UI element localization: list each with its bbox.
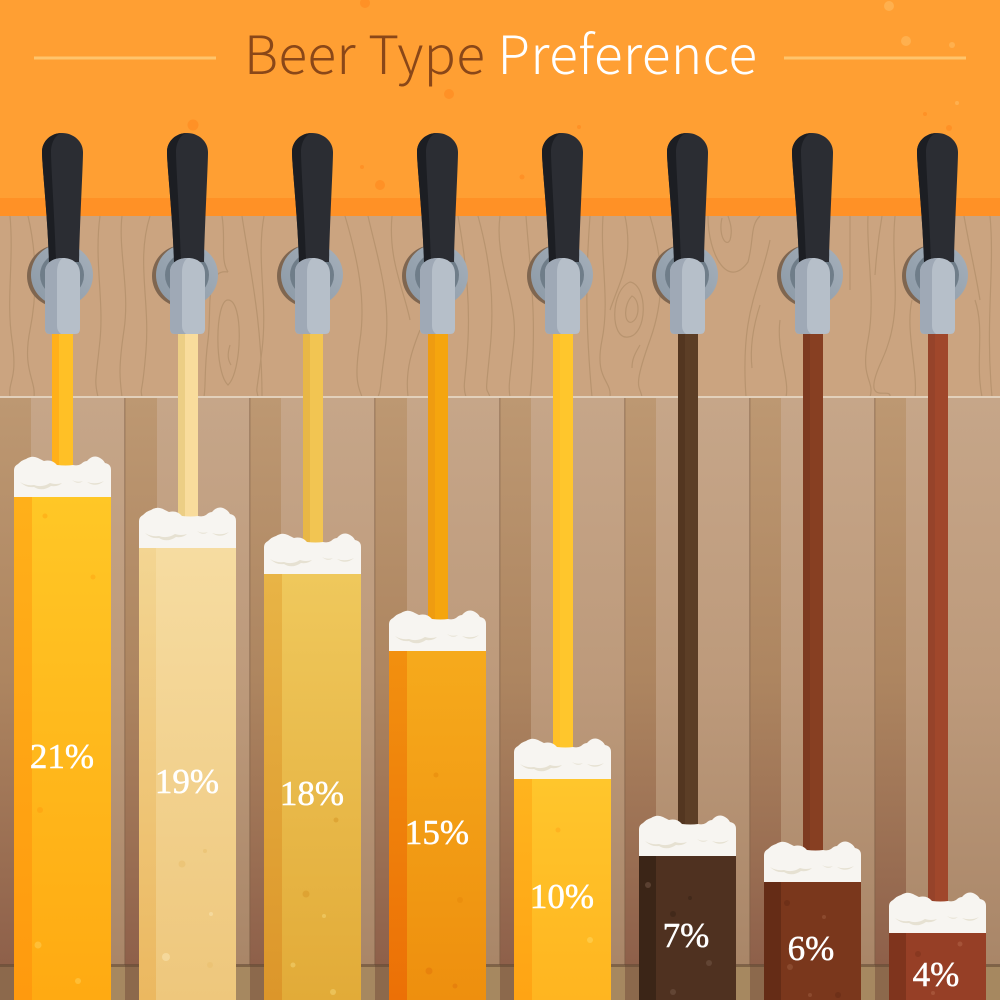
label 18%: 18% — [280, 774, 344, 813]
label 19%: 19% — [155, 762, 219, 801]
label 21%: 21% — [30, 737, 94, 776]
lower wood planks — [0, 396, 1000, 1000]
title rule left — [34, 56, 216, 60]
tap 4 — [402, 133, 468, 334]
beer 7: 6% — [764, 330, 861, 1000]
tap 8 — [902, 133, 968, 334]
tap 5 — [527, 133, 593, 334]
tap 1 — [27, 133, 93, 334]
tap 2 — [152, 133, 218, 334]
label 4%: 4% — [913, 955, 959, 994]
tap 3 — [277, 133, 343, 334]
beer 5: 10% — [514, 330, 611, 1000]
title rule right — [784, 56, 966, 60]
floor — [0, 964, 1000, 1000]
beer 3: 18% — [264, 330, 361, 1000]
tap 7 — [777, 133, 843, 334]
beer 8: 4% — [889, 330, 986, 1000]
beer 1: 21% — [14, 330, 111, 1000]
header background — [0, 0, 1000, 216]
beer 2: 19% — [139, 330, 236, 1000]
label 7%: 7% — [663, 916, 709, 955]
beer 6: 7% — [639, 330, 736, 1000]
upper wood panel with grain — [0, 216, 1000, 398]
label 6%: 6% — [788, 929, 834, 968]
label 15%: 15% — [405, 813, 469, 852]
tap 6 — [652, 133, 718, 334]
title: Beer Type Preference — [244, 14, 757, 90]
label 10%: 10% — [530, 877, 594, 916]
beer 4: 15% — [389, 330, 486, 1000]
